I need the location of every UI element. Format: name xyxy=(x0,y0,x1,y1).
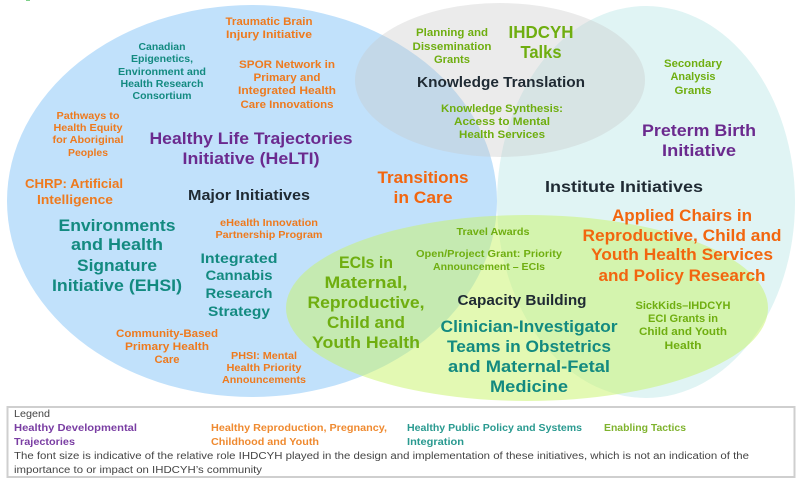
text: Knowledge Synthesis: Knowledge Synthesis: xyxy=(441,103,563,115)
text: Canadian Epigenetics consortium: Consortium xyxy=(132,91,192,102)
text: Traumatic Brain Injury Initiative xyxy=(226,16,313,41)
text: Clinician-Investigator: and Maternal-Fetal xyxy=(448,358,610,376)
text: Pathways to Health Equity: Health Equity xyxy=(54,123,123,134)
text: eHealth: Partnership Program xyxy=(216,230,323,241)
text: Transitions in Care xyxy=(378,169,468,207)
text: EHSI: Environments xyxy=(58,217,176,235)
text: Planning and Dissemination: Planning and xyxy=(416,27,488,39)
legend: Trajectories xyxy=(14,437,75,448)
text: Integrated Cannabis: Cannabis xyxy=(206,267,273,283)
text: Open/Project Grant: Open/Project Grant: Priority xyxy=(416,248,562,260)
text: PHSI: PHSI: Mental xyxy=(231,351,297,362)
heading: Capacity Building: Capacity Building xyxy=(458,293,586,309)
text: HeLTI: Initiative (HeLTI) xyxy=(182,149,320,168)
legend: Childhood and Youth xyxy=(211,437,319,448)
text: Integrated Cannabis: Strategy xyxy=(208,303,270,319)
text: Travel Awards: Travel Awards xyxy=(456,226,530,238)
text: PHSI xyxy=(222,351,306,386)
text: Clinician-Investigator: Teams in Obstetrics xyxy=(447,338,611,356)
text: HeLTI xyxy=(150,129,352,168)
text: Knowledge Synthesis: Health Services xyxy=(459,129,545,141)
text: ECIs xyxy=(308,254,424,352)
text: ECIs: Maternal, xyxy=(324,274,408,292)
circle: institute initiatives xyxy=(497,6,795,398)
text: Secondary Analysis: Secondary xyxy=(664,58,723,70)
text: Canadian Epigenetics consortium: Canadian xyxy=(138,42,186,53)
circle: knowledge translation xyxy=(355,3,645,157)
heading: Major Initiatives: Major Initiatives xyxy=(188,188,310,204)
text: IHDCYH Talks: Talks xyxy=(520,42,562,62)
text: Canadian Epigenetics consortium: Environment and xyxy=(118,67,206,78)
heading: Knowledge Translation: Knowledge Translation xyxy=(417,75,585,91)
text: Pathways to Health Equity: Peoples xyxy=(68,148,108,159)
text: Traumatic Brain Injury Initiative: Traumatic Brain xyxy=(226,16,313,28)
text: Clinician-Investigator: Clinician-Investigator xyxy=(440,318,618,336)
text: Community-Based xyxy=(116,328,218,366)
circle: major initiatives xyxy=(7,5,497,397)
text: SPOR Network xyxy=(238,59,336,111)
text: Canadian Epigenetics consortium: Health Research xyxy=(120,79,204,90)
heading: Institute Initiatives: Institute Initiatives xyxy=(545,179,703,196)
legend: Integration xyxy=(407,437,464,448)
text: IHDCYH Talks: IHDCYH xyxy=(508,22,574,42)
text: Applied Chairs xyxy=(582,207,782,285)
text: Planning and Dissemination xyxy=(412,27,492,66)
text: CHRP: CHRP: Artificial xyxy=(25,177,123,191)
text: IHDCYH Talks xyxy=(508,22,574,62)
text: ECIs: ECIs in xyxy=(339,254,393,272)
text: Integrated Cannabis: Research xyxy=(206,285,272,301)
text: Community-Based: Primary Health xyxy=(125,341,209,353)
text: SPOR Network: Care Innovations xyxy=(240,99,334,111)
legend xyxy=(8,407,794,477)
text: Secondary Analysis xyxy=(664,58,723,97)
text: HeLTI: Healthy Life Trajectories xyxy=(150,129,352,148)
text: Knowledge Synthesis: Access to Mental xyxy=(454,116,550,128)
text: CHRP xyxy=(25,177,123,207)
text: Canadian Epigenetics consortium: Epigenetics, xyxy=(131,54,193,65)
text: SickKids xyxy=(636,300,731,352)
text: Integrated Cannabis xyxy=(200,250,278,319)
text: Preterm Birth xyxy=(642,121,756,160)
text: Applied Chairs: and Policy Research xyxy=(598,267,766,285)
text: PHSI: Health Priority xyxy=(226,363,302,374)
text: CHRP: Intelligence xyxy=(37,193,113,207)
legend: Legend xyxy=(14,409,50,420)
text: Applied Chairs: Applied Chairs in xyxy=(612,207,752,225)
text: Clinician-Investigator xyxy=(440,318,618,396)
text: SickKids: Health xyxy=(664,340,702,352)
text: EHSI: Signature xyxy=(77,257,157,275)
text: Canadian Epigenetics consortium xyxy=(118,42,206,102)
legend: importance to or impact on IHDCYH’s community xyxy=(14,465,262,476)
text: Pathways to Health Equity: Pathways to xyxy=(56,111,120,122)
text: SPOR Network: Primary and xyxy=(254,72,320,84)
circle: capacity building xyxy=(286,215,768,401)
legend: The font size is indicative of the relative role IHDCYH played in the design and implementation of these initiatives, which is not an indication of the xyxy=(14,451,749,462)
legend: Healthy Public Policy and Systems xyxy=(407,423,582,434)
legend: Healthy Reproduction, Pregnancy, xyxy=(211,423,387,434)
text: Community-Based: Community-Based xyxy=(116,328,218,340)
text: Pathways to Health Equity: for Aboriginal xyxy=(52,135,124,146)
text: eHealth xyxy=(216,218,323,241)
text: EHSI xyxy=(52,217,182,295)
text: Transitions in Care: Transitions xyxy=(378,169,468,187)
text: Planning and Dissemination: Dissemination xyxy=(412,41,492,53)
text: Applied Chairs: Reproductive, Child and xyxy=(582,227,782,245)
legend: Enabling Tactics xyxy=(604,423,686,434)
text: eHealth: eHealth Innovation xyxy=(220,218,318,229)
text: Open/Project Grant xyxy=(416,248,562,273)
text: SPOR Network: Integrated Health xyxy=(238,85,336,97)
text: Traumatic Brain Injury Initiative: Injury Initiative xyxy=(226,29,312,41)
text: Secondary Analysis: Analysis xyxy=(670,71,716,83)
text: Clinician-Investigator: Medicine xyxy=(490,378,568,396)
text: Pathways to Health Equity xyxy=(52,111,124,159)
text: SickKids: ECI Grants in xyxy=(648,313,718,325)
text: SickKids: Child and Youth xyxy=(639,326,727,338)
text: SickKids: SickKids–IHDCYH xyxy=(636,300,731,312)
text: Knowledge Synthesis xyxy=(441,103,563,141)
text: ECIs: Youth Health xyxy=(312,334,420,352)
text: Transitions in Care: in Care xyxy=(394,189,452,207)
text: Secondary Analysis: Grants xyxy=(674,85,712,97)
text: Preterm Birth: Preterm Birth xyxy=(642,121,756,140)
text: ECIs: Child and xyxy=(327,314,405,332)
text: Planning and Dissemination: Grants xyxy=(434,54,470,66)
text: Integrated Cannabis: Integrated xyxy=(200,250,278,266)
text: Applied Chairs: Youth Health Services xyxy=(591,246,773,264)
text: Preterm Birth: Initiative xyxy=(662,141,736,160)
text: EHSI: and Health xyxy=(71,236,163,254)
text: EHSI: Initiative (EHSI) xyxy=(52,277,182,295)
text: SPOR Network: SPOR Network in xyxy=(239,59,335,71)
legend: Healthy Developmental xyxy=(14,423,137,434)
text: PHSI: Announcements xyxy=(222,375,306,386)
text: Community-Based: Care xyxy=(154,354,180,366)
text: ECIs: Reproductive, xyxy=(308,294,424,312)
text: Open/Project Grant: Announcement – ECIs xyxy=(433,261,545,273)
